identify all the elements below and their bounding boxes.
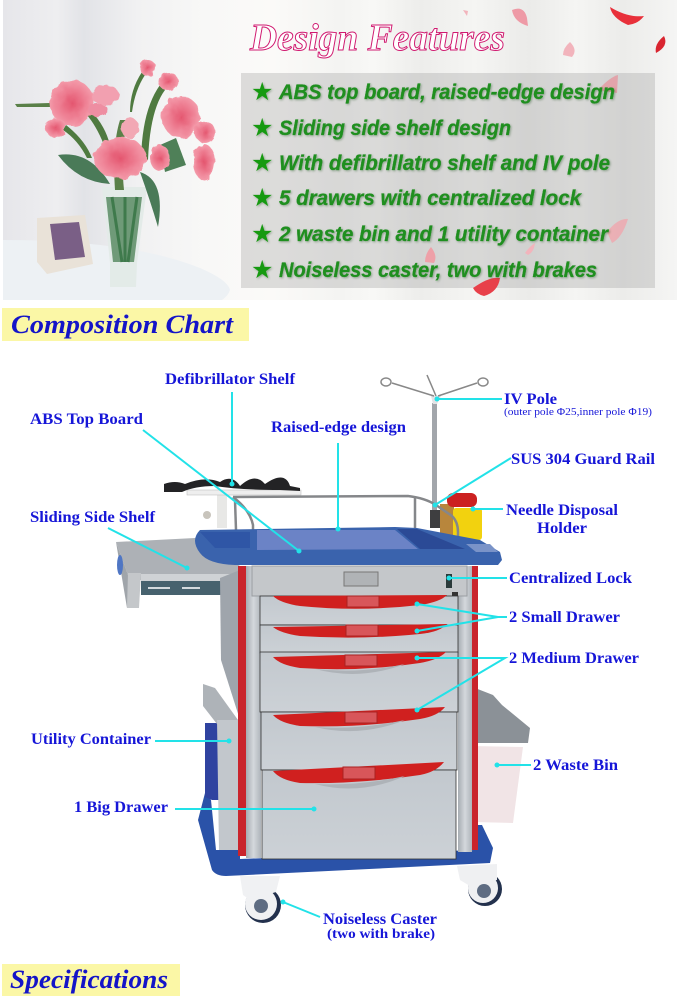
heading: specifications: Specifications: [10, 965, 168, 994]
cart: guard rail: [233, 496, 458, 545]
callout: 2 medium drawer: [414, 650, 639, 712]
cart: needle disposal holder: [430, 493, 482, 540]
callout: utility container: Utility Container: [31, 731, 151, 748]
callout: needle disposal holder: [470, 502, 619, 537]
feature 3: With defibrillatro shelf and IV pole: [279, 152, 610, 175]
feature list: [251, 77, 615, 284]
cart: casters: [240, 864, 502, 923]
feature 3: ★: [251, 148, 273, 177]
photo: leaves and stems: [15, 72, 186, 227]
cart: base: [198, 793, 493, 876]
callout: 1 big drawer: [74, 799, 316, 816]
callout: IV pole: [434, 391, 652, 418]
big drawer: [262, 762, 456, 859]
banner background curtain: [3, 0, 677, 300]
cart: lock panel: [252, 566, 467, 608]
callout: needle disposal holder: Holder: [537, 520, 587, 537]
feature 2: [251, 113, 511, 142]
callout: 2 waste bin: 2 Waste Bin: [533, 757, 618, 774]
callout: 2 waste bin: [494, 757, 618, 774]
small drawer 1: [260, 595, 458, 625]
photo: glass vase: [102, 187, 147, 287]
photo: round table: [3, 240, 230, 300]
callout: IV pole: (outer pole Φ25,inner pole Φ19): [504, 407, 652, 418]
feature 1: ABS top board, raised-edge design: [278, 81, 615, 104]
small drawer 2: [260, 624, 458, 653]
feature 4: 5 drawers with centralized lock: [279, 187, 582, 210]
medium drawer 2: [261, 707, 457, 770]
cart: ABS top board: [195, 527, 502, 565]
callout: raised-edge design: [271, 419, 406, 532]
callout: needle disposal holder: Needle Disposal: [506, 502, 619, 519]
callout: IV pole: IV Pole: [504, 391, 557, 408]
callout: defibrillator shelf: Defibrillator Shelf: [165, 371, 296, 388]
callout: ABS top board: [30, 411, 302, 554]
feature 5: ★: [251, 219, 273, 248]
feature 4: ★: [251, 183, 273, 212]
product: medical cart: [116, 375, 530, 923]
callout: 1 big drawer: 1 Big Drawer: [74, 799, 168, 816]
callout: raised-edge design: Raised-edge design: [271, 419, 406, 436]
callout: utility container: [31, 731, 232, 748]
callout: centralized lock: Centralized Lock: [509, 570, 632, 587]
callout: SUS 304 guard rail: SUS 304 Guard Rail: [511, 451, 656, 468]
callout: noiseless caster: Noiseless Caster: [323, 911, 437, 928]
callout: SUS 304 guard rail: [432, 451, 656, 508]
cart: utility container: [203, 684, 238, 850]
callout: centralized lock: [446, 570, 632, 587]
medium drawer 1: [260, 652, 458, 712]
callout: noiseless caster: [280, 900, 437, 942]
feature 2: Sliding side shelf design: [279, 117, 511, 140]
petals: [425, 7, 665, 296]
callout: sliding side shelf: Sliding Side Shelf: [30, 509, 156, 526]
feature 6: Noiseless caster, two with brakes: [279, 259, 597, 282]
feature 5: 2 waste bin and 1 utility container: [278, 223, 610, 246]
feature 1: ★: [251, 77, 273, 106]
cart: defibrillator shelf: [164, 477, 301, 528]
cart: body side: [220, 570, 240, 720]
callout: 2 small drawer: 2 Small Drawer: [509, 609, 620, 626]
cart: sliding side shelf: [116, 538, 240, 608]
panel: feature list background: [241, 73, 655, 288]
cart: waste bin: [473, 688, 530, 823]
callout: ABS top board: ABS Top Board: [30, 411, 143, 428]
heading: design features: Design Features: [249, 17, 505, 59]
cart: IV pole: [381, 375, 488, 513]
photo: tulip blooms: [46, 60, 215, 180]
callout: noiseless caster: (two with brake): [327, 927, 435, 942]
heading: composition chart: Composition Chart: [11, 310, 234, 339]
callout: sliding side shelf: [30, 509, 190, 570]
top banner: design features: [3, 0, 677, 300]
callout: 2 medium drawer: 2 Medium Drawer: [509, 650, 639, 667]
callout: 2 small drawer: [414, 602, 620, 634]
photo: picture frame: [37, 215, 93, 274]
feature 2: ★: [251, 113, 273, 142]
cart: frame posts: [238, 566, 478, 858]
callout: defibrillator shelf: [165, 371, 296, 486]
cart: five drawers: [260, 595, 458, 859]
feature 6: ★: [251, 255, 273, 284]
